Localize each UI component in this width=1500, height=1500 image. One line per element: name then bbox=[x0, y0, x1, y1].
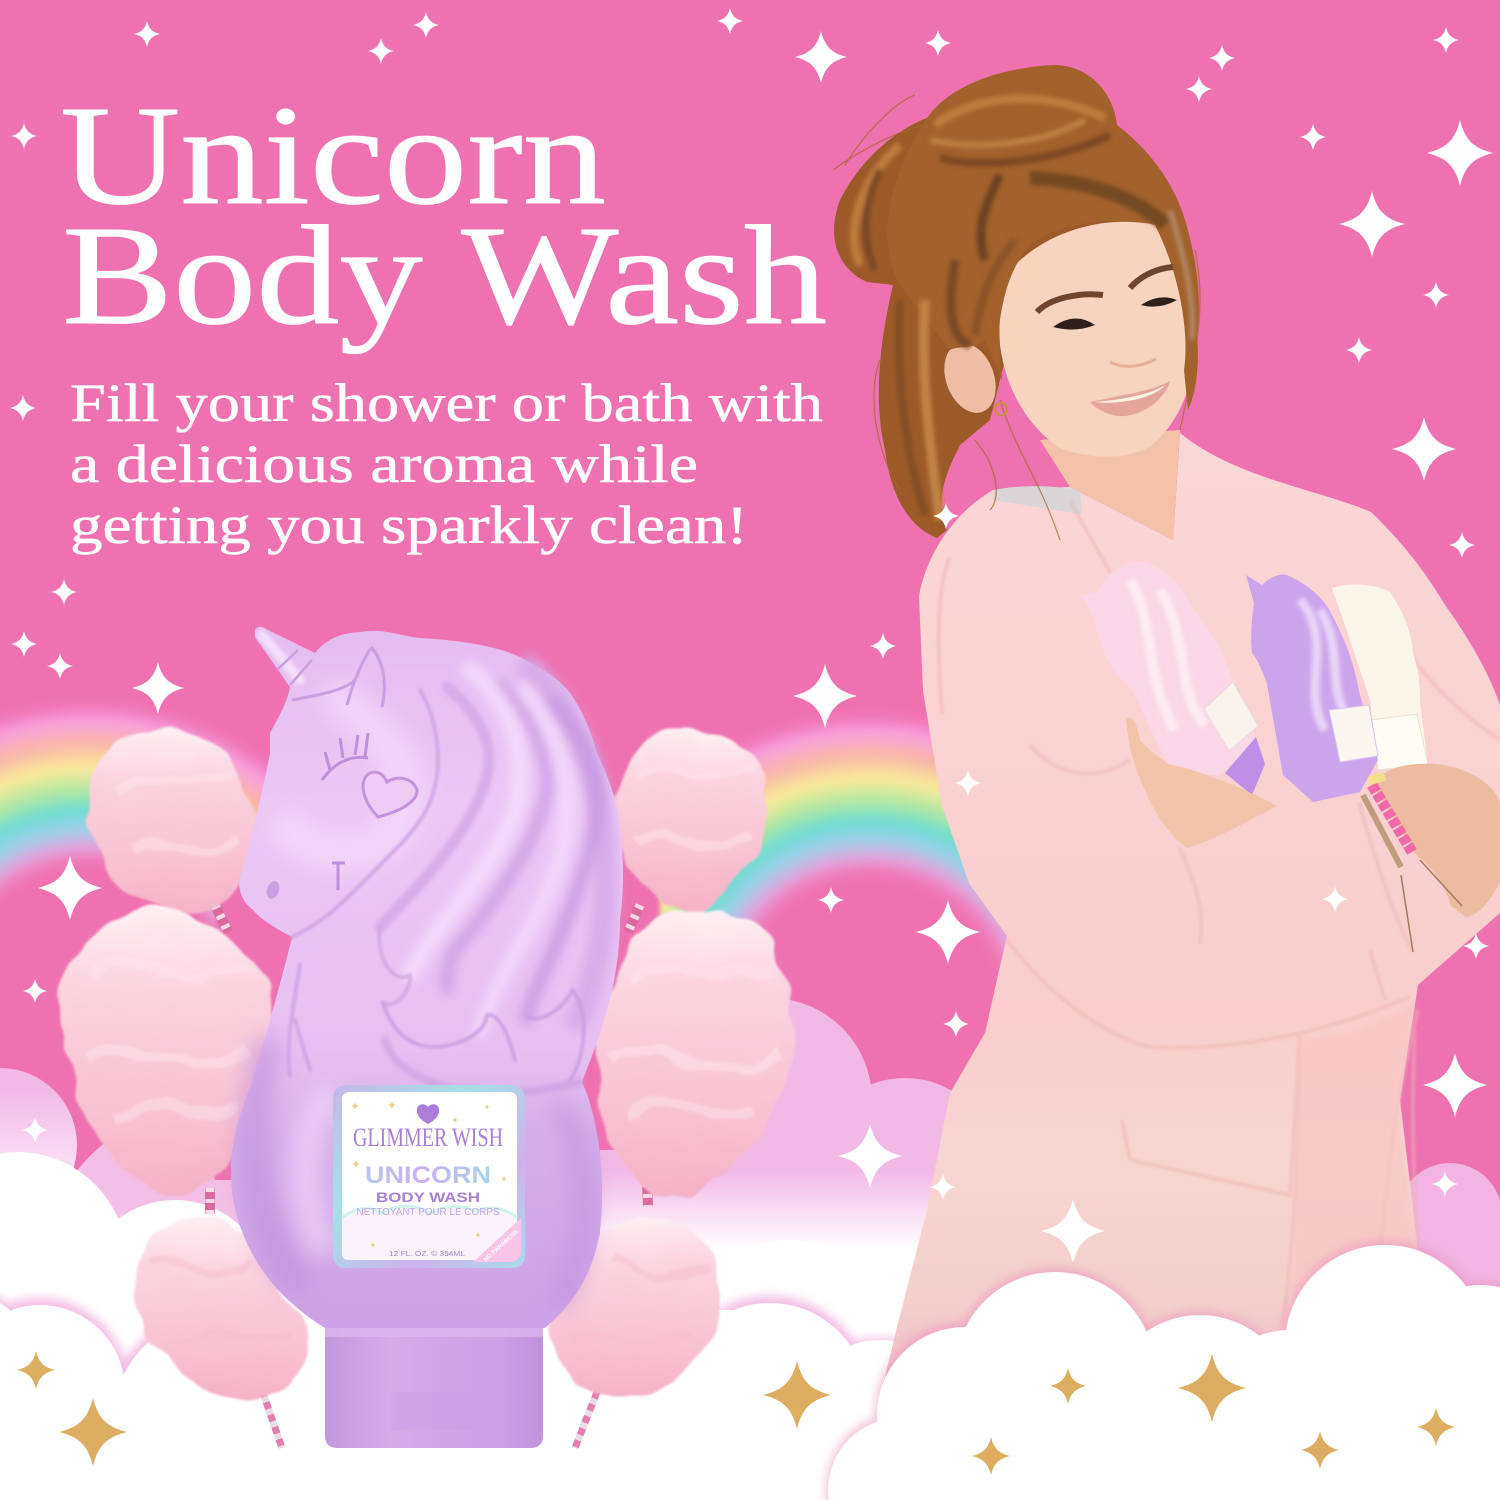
rainbow cover patches bbox=[0, 860, 1010, 1325]
back pink clouds bbox=[0, 998, 1500, 1360]
girl hand left bbox=[1126, 718, 1277, 848]
eyes bbox=[1037, 267, 1177, 330]
title: Body Wash bbox=[62, 196, 827, 354]
cotton candy bottom left bbox=[136, 1217, 306, 1398]
bottle horn and ear bbox=[262, 635, 384, 707]
candy sticks bbox=[210, 905, 648, 1448]
purple bottle held bbox=[1246, 574, 1378, 802]
label stars bbox=[351, 1101, 507, 1248]
bottle body bbox=[231, 627, 623, 1328]
robe folds bbox=[939, 500, 1500, 1340]
description text bbox=[70, 373, 823, 555]
description text: getting you sparkly clean! bbox=[70, 495, 748, 555]
cream bottle held bbox=[1332, 585, 1428, 770]
bottle cap bbox=[325, 1325, 543, 1448]
bottle eye lashes bbox=[322, 733, 368, 780]
description text: Fill your shower or bath with bbox=[70, 373, 823, 433]
label volume: 12 FL. OZ. © 354ML bbox=[389, 1250, 465, 1258]
cotton candy middle right bbox=[595, 908, 795, 1193]
label product name: UNICORN bbox=[365, 1162, 491, 1189]
hair top and bun bbox=[887, 65, 1199, 410]
hood grey lining bbox=[993, 486, 1082, 515]
cotton candy group bbox=[62, 727, 795, 1448]
cotton candy middle left bbox=[62, 908, 274, 1192]
product: unicorn bottle bbox=[231, 627, 623, 1448]
bottle mane shading bbox=[253, 668, 605, 1300]
left rainbow bbox=[0, 698, 392, 1302]
title bbox=[60, 76, 827, 354]
ear bbox=[935, 336, 1005, 420]
label corner ribbon bbox=[473, 1218, 521, 1263]
white clouds, left and centre bbox=[0, 1292, 965, 1500]
back white clouds bbox=[0, 1152, 930, 1440]
label heart logo bbox=[417, 1104, 439, 1124]
neck bbox=[1040, 430, 1180, 540]
gold sparkles bbox=[17, 1351, 1455, 1475]
product label bbox=[333, 1085, 525, 1268]
title: Unicorn bbox=[60, 76, 606, 234]
robe belt shading bbox=[1290, 1005, 1415, 1300]
face bbox=[999, 222, 1197, 457]
label french name: NETTOYANT POUR LE CORPS bbox=[356, 1207, 500, 1218]
girl in robe bbox=[833, 65, 1500, 1410]
bottle nostril and smile bbox=[264, 863, 345, 901]
description text: a delicious aroma while bbox=[70, 434, 698, 494]
label body wash: BODY WASH bbox=[376, 1189, 480, 1205]
shadow of foreground cloud bbox=[826, 1241, 1500, 1500]
smile bbox=[1090, 381, 1170, 416]
hair back and tail bbox=[834, 118, 1195, 538]
cotton candy top right bbox=[612, 727, 768, 910]
bottle heart bbox=[363, 772, 417, 817]
cotton candy top left bbox=[87, 729, 256, 913]
white cloud foreground right bbox=[828, 1245, 1500, 1500]
bracelets bbox=[1363, 776, 1462, 952]
label corner ribbon: NO PARABENS bbox=[483, 1229, 519, 1263]
hair wisps bbox=[833, 95, 1200, 540]
soft pink shadow of front clouds bbox=[0, 1288, 962, 1500]
pink bottle held bbox=[1080, 561, 1265, 795]
cotton candy bottom right bbox=[550, 1216, 722, 1398]
right rainbow bbox=[568, 709, 1172, 1313]
robe bbox=[877, 433, 1500, 1410]
nose bbox=[1110, 359, 1156, 366]
label brand name: GLIMMER WISH bbox=[353, 1123, 503, 1152]
earring bbox=[995, 403, 1007, 415]
girl hand right bbox=[1371, 764, 1500, 917]
hair shading bbox=[854, 99, 1193, 520]
